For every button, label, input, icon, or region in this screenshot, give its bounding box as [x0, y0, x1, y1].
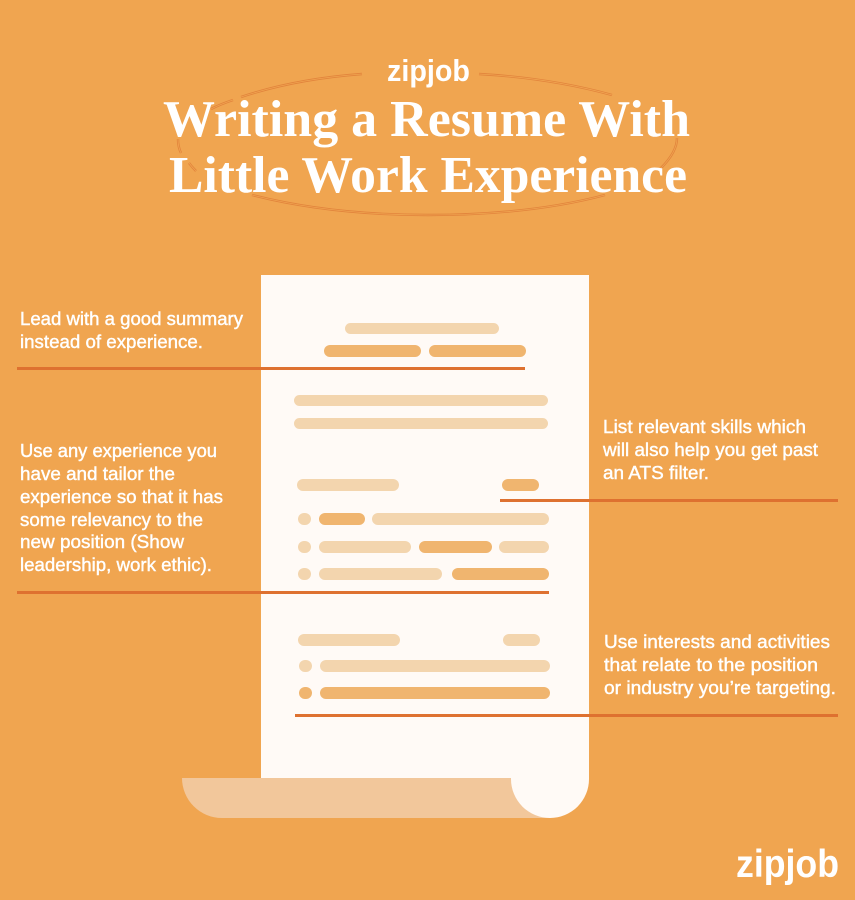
callout: experience: Use any experience you	[20, 441, 217, 461]
callout: skills: an ATS filter.	[603, 463, 709, 483]
header placeholder bars	[324, 323, 526, 357]
title	[163, 91, 690, 204]
callout: experience: some relevancy to the	[20, 510, 203, 530]
interests placeholder bars	[298, 634, 550, 699]
callout: experience: have and tailor the	[20, 464, 175, 484]
decorative oval around title	[178, 74, 677, 215]
callout: experience: new position (Show	[20, 532, 185, 552]
callout: interests: Use interests and activities	[604, 632, 830, 652]
paper sheet	[261, 275, 589, 818]
title: Writing a Resume With	[163, 91, 690, 148]
illustration: resume document	[182, 275, 589, 818]
callout: interests	[295, 632, 838, 717]
callout: experience: leadership, work ethic).	[20, 555, 212, 575]
callout: skills	[500, 417, 838, 502]
callout: experience: experience so that it has	[20, 487, 223, 507]
logo: bottom zipjob: zipjob	[736, 843, 839, 886]
experience placeholder bars	[297, 479, 549, 580]
callout: skills: will also help you get past	[602, 440, 818, 460]
paper curl tail	[182, 778, 550, 818]
summary placeholder bars	[294, 395, 548, 429]
callout: skills: List relevant skills which	[603, 417, 806, 437]
callout: interests: that relate to the position	[604, 655, 818, 675]
callout: summary: Lead with a good summary	[20, 309, 243, 329]
callout: interests: or industry you’re targeting.	[604, 678, 836, 698]
callout: summary: instead of experience.	[20, 332, 203, 352]
callout: experience	[17, 441, 549, 594]
callout: summary	[17, 309, 525, 370]
logo: top zipjob: zipjob	[387, 53, 470, 88]
title: Little Work Experience	[169, 147, 687, 204]
